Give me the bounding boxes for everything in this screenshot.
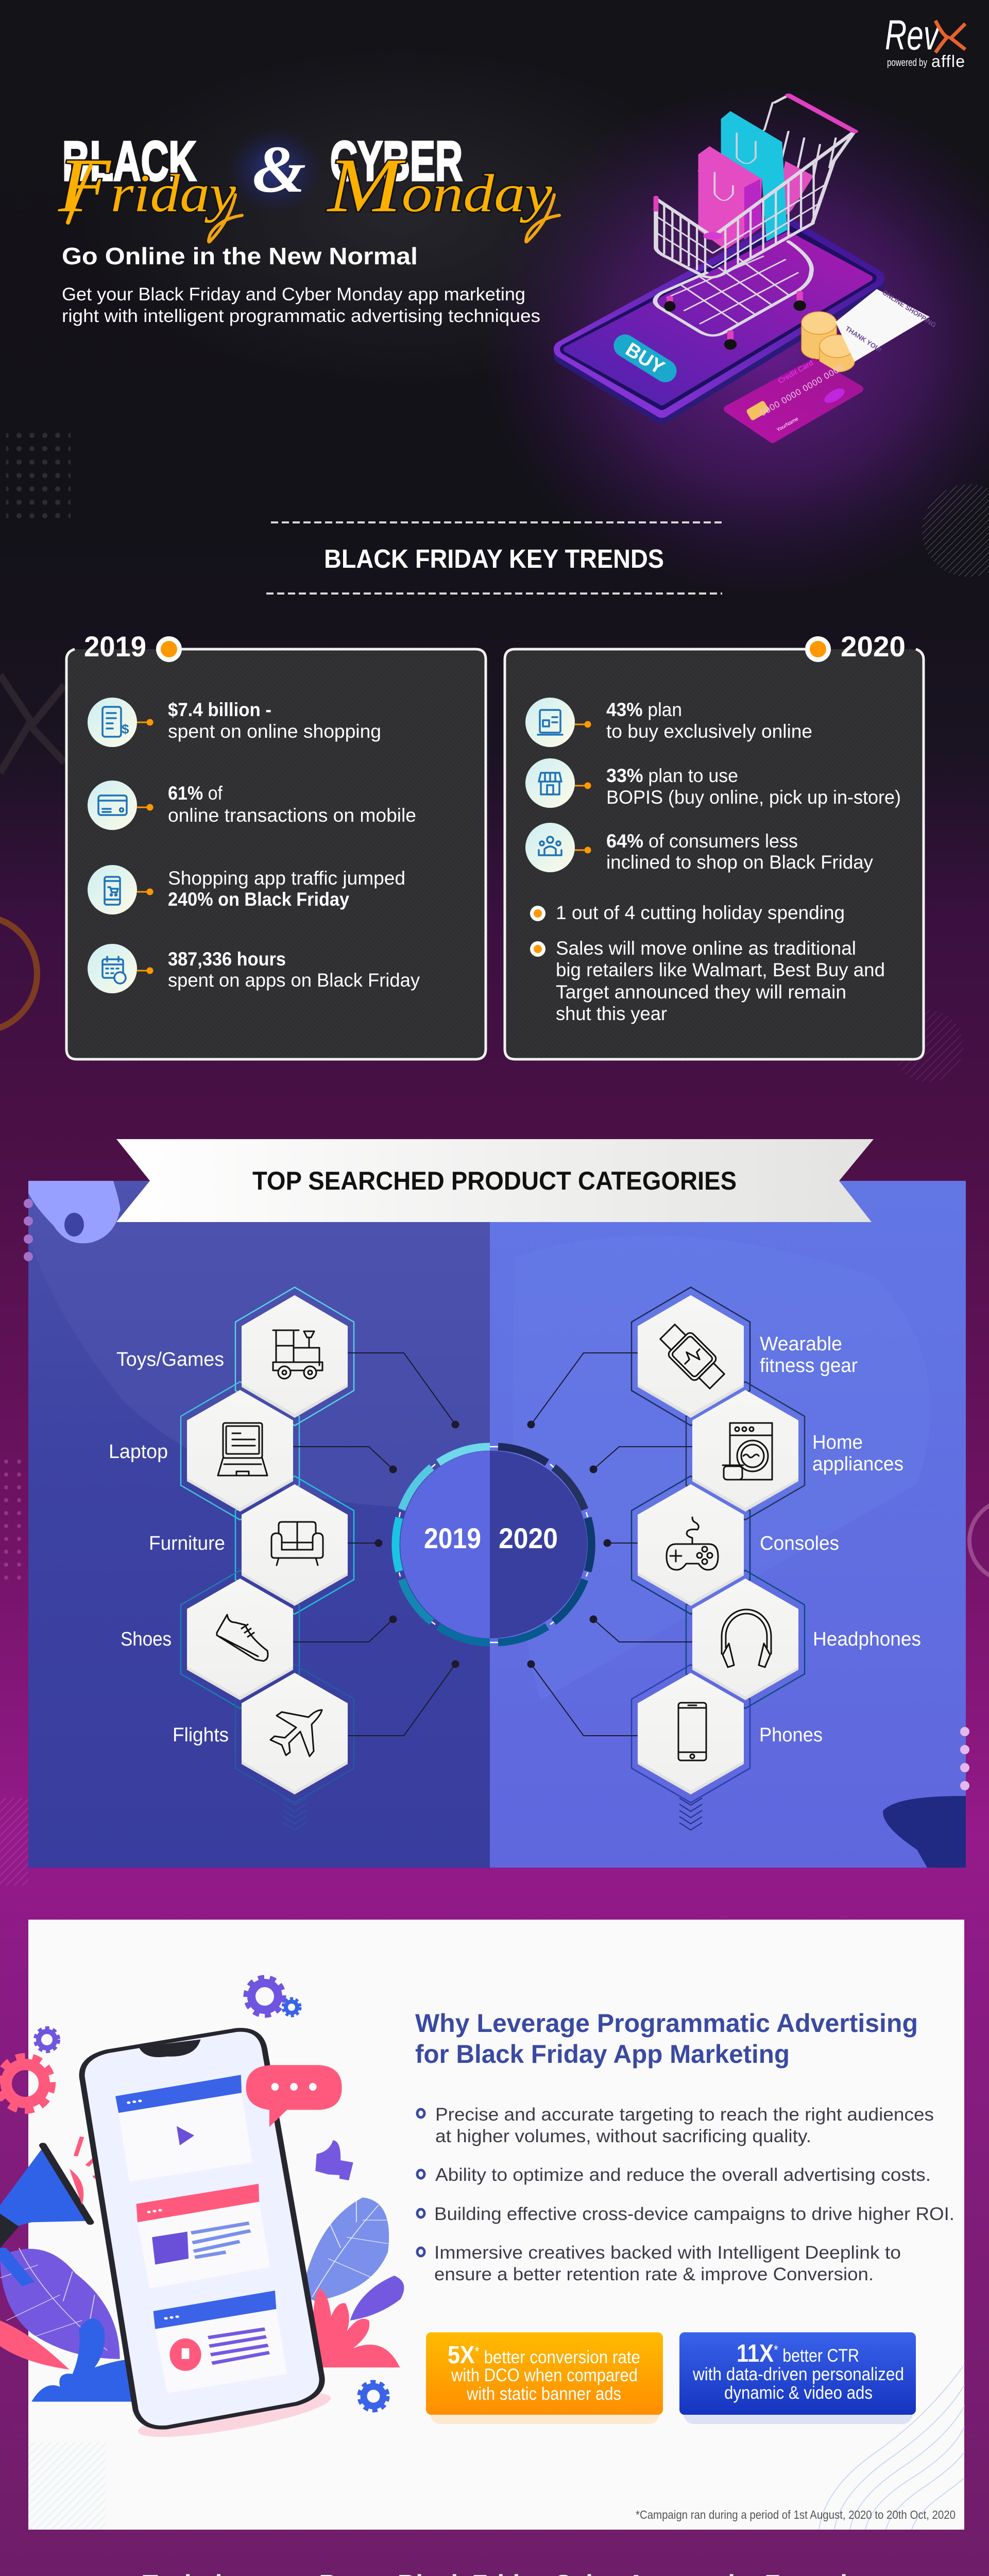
category: Toys/Games bbox=[116, 1295, 348, 1418]
ad card: article bbox=[136, 2184, 270, 2289]
year 2019 bbox=[84, 630, 182, 663]
speech bubble bbox=[246, 2065, 342, 2127]
heading: why leverage bbox=[415, 2009, 918, 2069]
callout: 5X conversion: better conversion rate bbox=[480, 2347, 640, 2367]
leaves and plants bbox=[0, 2197, 404, 2402]
category: Shoes bbox=[121, 1579, 293, 1700]
category: Flights: Flights bbox=[173, 1724, 229, 1746]
stat: mobile transactions: 61% of bbox=[168, 783, 223, 804]
title: Black Friday & Cyber Monday: & bbox=[252, 132, 306, 207]
gears bbox=[0, 1977, 388, 2411]
receipt bbox=[835, 289, 937, 362]
illustration: phone and shopping cart bbox=[562, 95, 937, 439]
button: BUY: BUY bbox=[622, 338, 668, 379]
stat: BOPIS bbox=[525, 758, 901, 808]
category: Furniture bbox=[149, 1484, 348, 1606]
illustration: phone marketing bbox=[0, 1977, 404, 2446]
category: Laptop: Laptop bbox=[109, 1441, 168, 1463]
subtitle: Go Online in the New Normal bbox=[62, 243, 418, 269]
credit card bbox=[727, 359, 860, 439]
title: Black Friday & Cyber Monday: CYBER bbox=[330, 130, 463, 193]
ring: 2019 vs 2020: 2020 bbox=[499, 1522, 558, 1554]
panel: 2019 trends bbox=[66, 630, 486, 1059]
bullet list: at higher volumes, without sacrificing quality. bbox=[435, 2126, 811, 2146]
stat: mobile transactions: online transactions on mobile bbox=[168, 805, 416, 826]
title: Black Friday & Cyber Monday: Friday bbox=[58, 143, 236, 228]
credit card: 0000 0000 0000 0000 bbox=[758, 362, 846, 418]
stat: hours on apps bbox=[88, 944, 420, 993]
intro text bbox=[62, 284, 540, 326]
button: BUY bbox=[609, 330, 681, 386]
bullet list: Building effective cross-device campaigns to drive higher ROI. bbox=[434, 2204, 954, 2224]
bullet: sales move online: shut this year bbox=[556, 1003, 667, 1024]
category: Phones bbox=[638, 1673, 823, 1794]
stat: online shopping: spent on online shopping bbox=[168, 721, 381, 742]
back wires bbox=[699, 103, 835, 176]
callout: 11X CTR: with data-driven personalized bbox=[692, 2364, 904, 2384]
cart basket front bbox=[656, 199, 812, 277]
stat: buy online: 43% plan bbox=[606, 699, 682, 720]
year 2020: 2020 bbox=[841, 630, 906, 663]
stat: app traffic: 240% on Black Friday bbox=[168, 889, 349, 910]
stat: BOPIS: 33% plan to use bbox=[606, 765, 738, 786]
stat: buy online bbox=[525, 698, 812, 747]
category: Laptop bbox=[109, 1390, 293, 1512]
stat: hours on apps: 387,336 hours bbox=[168, 948, 286, 970]
callout: 11X CTR: * bbox=[774, 2342, 778, 2358]
callout: 5X conversion: with static banner ads bbox=[466, 2384, 621, 2404]
stat: online shopping: $7.4 billion - bbox=[168, 699, 271, 720]
category: Phones: Phones bbox=[759, 1724, 823, 1746]
stat: app traffic bbox=[88, 865, 405, 914]
bullet: sales move online: Target announced they will remain bbox=[556, 981, 846, 1003]
callout: 5X conversion: with DCO when compared bbox=[451, 2365, 638, 2385]
bags bbox=[773, 161, 814, 227]
thumbs up bbox=[315, 2140, 353, 2180]
category: Home appliances: Home bbox=[812, 1432, 863, 1453]
shopping cart bbox=[655, 95, 855, 350]
callout: 5X conversion: * bbox=[475, 2344, 480, 2359]
panel: product categories bbox=[24, 1139, 969, 1868]
category: Wearable fitness gear: fitness gear bbox=[760, 1355, 858, 1377]
category: Wearable fitness gear: Wearable bbox=[760, 1333, 842, 1355]
category: Consoles bbox=[638, 1484, 839, 1606]
category: Furniture: Furniture bbox=[149, 1533, 225, 1554]
category: Wearable fitness gear bbox=[638, 1295, 858, 1418]
title: Black Friday & Cyber Monday bbox=[58, 126, 559, 242]
panel: why programmatic bbox=[0, 1920, 964, 2530]
ring: 2019 vs 2020 bbox=[396, 1447, 591, 1642]
credit card: Credit Card bbox=[777, 359, 815, 385]
year 2019: 2019 bbox=[84, 630, 146, 663]
callout: 5X conversion bbox=[426, 2332, 663, 2424]
category: Home appliances bbox=[692, 1390, 903, 1512]
category: Shoes: Shoes bbox=[121, 1629, 172, 1650]
bullet list: ensure a better retention rate & improve Conversion. bbox=[434, 2264, 874, 2284]
ad card: profile bbox=[154, 2291, 287, 2393]
callout: 11X CTR: better CTR bbox=[778, 2346, 859, 2366]
heading: why leverage: Why Leverage Programmatic Advertising bbox=[415, 2009, 918, 2038]
bullet: sales move online: Sales will move online as traditional bbox=[556, 938, 856, 959]
stat: BOPIS: BOPIS (buy online, pick up in-store) bbox=[606, 787, 901, 808]
logo: RevX top right: powered by bbox=[887, 57, 927, 69]
ribbon heading bbox=[116, 1139, 874, 1222]
stat: app traffic: Shopping app traffic jumped bbox=[168, 868, 405, 889]
ribbon heading: TOP SEARCHED PRODUCT CATEGORIES bbox=[252, 1166, 737, 1195]
category: Consoles: Consoles bbox=[760, 1533, 839, 1554]
category: Headphones bbox=[692, 1579, 921, 1700]
year 2020 bbox=[805, 630, 906, 663]
callout: 11X CTR bbox=[679, 2332, 916, 2424]
callout: 11X CTR: 11X bbox=[737, 2340, 774, 2367]
callout: 5X conversion: 5X bbox=[448, 2342, 475, 2369]
callout: 11X CTR: dynamic & video ads bbox=[724, 2383, 873, 2403]
category: Flights bbox=[173, 1673, 348, 1794]
connectors bbox=[284, 1353, 692, 1736]
ad card: video bbox=[115, 2075, 252, 2182]
bullet list: Precise and accurate targeting to reach the right audiences bbox=[435, 2105, 934, 2125]
coins bbox=[802, 312, 855, 372]
megaphone bbox=[0, 2137, 120, 2286]
credit card: YourName bbox=[776, 416, 799, 433]
stat: consumers: inclined to shop on Black Friday bbox=[606, 852, 873, 873]
stat: online shopping bbox=[88, 698, 381, 747]
title: Black Friday & Cyber Monday: BLACK bbox=[62, 130, 196, 193]
category: Home appliances: appliances bbox=[812, 1453, 903, 1475]
phone bbox=[562, 227, 876, 415]
receipt: THANK YOU! bbox=[844, 325, 883, 354]
logo: RevX top right: affle bbox=[931, 52, 966, 71]
category: Headphones: Headphones bbox=[813, 1629, 921, 1650]
bullet: sales move online bbox=[530, 938, 885, 1024]
stat: buy online: to buy exclusively online bbox=[606, 721, 812, 742]
intro text: right with intelligent programmatic advertising techniques bbox=[62, 306, 540, 326]
cart lower rack bbox=[655, 242, 812, 350]
bullet list bbox=[417, 2105, 954, 2284]
bullet list: Ability to optimize and reduce the overall advertising costs. bbox=[435, 2165, 931, 2185]
bullet: sales move online: big retailers like Walmart, Best Buy and bbox=[556, 959, 885, 980]
stat: consumers: 64% of consumers less bbox=[606, 831, 798, 852]
bullet: holiday spending: 1 out of 4 cutting holiday spending bbox=[556, 902, 845, 923]
ring: 2019 vs 2020: 2019 bbox=[424, 1522, 481, 1554]
logo: RevX top right: Rev bbox=[885, 12, 940, 59]
stat: mobile transactions bbox=[88, 781, 416, 830]
intro text: Get your Black Friday and Cyber Monday app marketing bbox=[62, 284, 525, 304]
bullet list: Immersive creatives backed with Intelligent Deeplink to bbox=[434, 2243, 901, 2263]
phone bbox=[82, 2030, 322, 2428]
category: Toys/Games: Toys/Games bbox=[116, 1349, 224, 1370]
stat: online shopping: $ bbox=[122, 721, 129, 737]
stat: consumers bbox=[525, 823, 873, 873]
stat: hours on apps: spent on apps on Black Friday bbox=[168, 970, 420, 991]
heading: why leverage: for Black Friday App Marketing bbox=[415, 2040, 790, 2069]
receipt: ONLINE SHOPPING bbox=[881, 289, 937, 329]
heading: key trends: BLACK FRIDAY KEY TRENDS bbox=[324, 544, 664, 573]
footnote: *Campaign ran during a period of 1st August, 2020 to 20th Oct, 2020 bbox=[636, 2508, 956, 2521]
panel: 2020 trends bbox=[505, 630, 924, 1059]
title: Black Friday & Cyber Monday: Monday bbox=[327, 143, 553, 228]
